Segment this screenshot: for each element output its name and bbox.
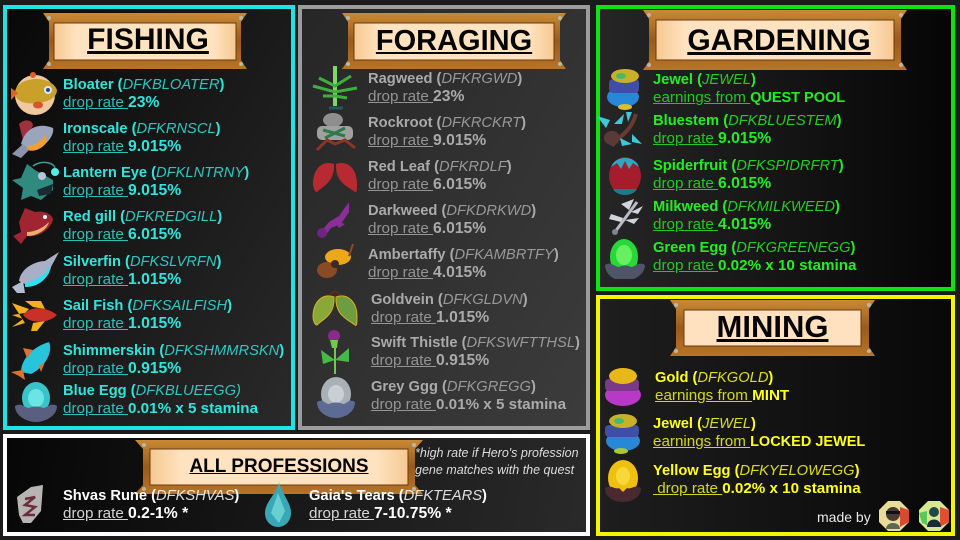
item: grey egg	[311, 374, 581, 418]
note: high rate condition: *high rate if Hero's profession	[415, 446, 579, 460]
text: gaia's tears: Gaia's Tears (DFKTEARS)	[309, 488, 487, 504]
text: grey egg: Grey Ggg (DFKGREGG)	[371, 379, 536, 395]
text: jewel	[653, 415, 865, 451]
text: shvas rune	[63, 487, 239, 523]
icon: shimmerskin fish	[11, 342, 50, 380]
icon: milkweed	[601, 194, 649, 238]
text: goldvein	[371, 291, 528, 327]
text: green egg: drop rate 0.02% x 10 stamina	[653, 257, 856, 274]
text: shimmerskin: drop rate 0.915%	[63, 360, 181, 377]
item: red gill	[13, 208, 222, 244]
panel: fishing	[3, 5, 295, 430]
heading: all professions banner	[135, 440, 423, 494]
heading: fishing banner	[43, 13, 247, 69]
text: red gill: Red gill (DFKREDGILL)	[63, 209, 222, 225]
text: ironscale: drop rate 9.015%	[63, 138, 181, 155]
item: gaia's tears	[257, 483, 527, 527]
heading: mining banner	[670, 300, 875, 356]
text: silverfin: drop rate 1.015%	[63, 271, 181, 288]
heading: foraging banner	[342, 13, 566, 69]
text: gold: earnings from MINT	[655, 387, 789, 404]
text: ironscale	[63, 121, 221, 155]
heading: foraging banner: FORAGING	[376, 25, 532, 57]
text: blue egg	[63, 383, 258, 417]
text: jewel: earnings from QUEST POOL	[653, 89, 845, 106]
text: milkweed: drop rate 4.015%	[653, 216, 771, 233]
item: milkweed	[601, 194, 871, 238]
text: ambertaffy	[368, 246, 559, 282]
text: silverfin: Silverfin (DFKSLVRFN)	[63, 254, 221, 270]
item: darkweed	[317, 202, 536, 238]
text: jewel	[653, 71, 845, 107]
text: yellow egg	[653, 462, 861, 498]
text: sail fish	[63, 298, 232, 332]
text: spiderfruit	[653, 157, 844, 193]
text: gold: Gold (DFKGOLD)	[655, 370, 773, 386]
icon: ironscale fish	[12, 120, 54, 158]
text: yellow egg: Yellow Egg (DFKYELOWEGG)	[653, 463, 860, 479]
item: lantern eye	[12, 162, 249, 200]
heading: gardening banner: GARDENING	[687, 24, 871, 57]
icon: sail fish	[12, 301, 57, 331]
text: goldvein: Goldvein (DFKGLDVN)	[371, 292, 528, 308]
text: bloater: drop rate 23%	[63, 94, 159, 111]
text: gold	[655, 369, 789, 405]
icon: swift thistle	[311, 330, 359, 374]
item: jewel	[599, 411, 869, 455]
item: spiderfruit	[601, 153, 871, 197]
icon: lantern eye fish	[12, 162, 59, 200]
text: ragweed	[368, 71, 522, 105]
text: bloater	[63, 77, 224, 111]
text: green egg: Green Egg (DFKGREENEGG)	[653, 240, 855, 256]
item: silverfin	[12, 252, 221, 293]
item: bloater	[11, 72, 224, 115]
icon: red gill fish	[13, 208, 53, 244]
text: blue egg: drop rate 0.01% x 5 stamina	[63, 400, 258, 417]
heading: mining banner: MINING	[717, 309, 828, 344]
text: bloater: Bloater (DFKBLOATER)	[63, 77, 224, 93]
text: silverfin	[63, 254, 221, 288]
text: bluestem	[653, 112, 842, 148]
icon: spiderfruit	[601, 153, 649, 197]
text: darkweed	[368, 203, 536, 237]
text: rockroot	[368, 115, 526, 149]
text: darkweed: Darkweed (DFKDRKWD)	[368, 203, 536, 219]
text: spiderfruit: Spiderfruit (DFKSPIDRFRT)	[653, 158, 844, 174]
icon: jewel bag	[599, 67, 647, 111]
text: lantern eye	[63, 165, 249, 199]
text: rockroot: Rockroot (DFKRCKRT)	[368, 115, 526, 131]
text: goldvein: drop rate 1.015%	[371, 309, 489, 326]
text: ambertaffy: Ambertaffy (DFKAMBRTFY)	[368, 247, 559, 263]
icon: red leaf	[313, 163, 357, 192]
text: grey egg	[371, 378, 566, 414]
text: lantern eye: drop rate 9.015%	[63, 182, 181, 199]
item: shvas rune	[11, 483, 281, 527]
text: swift thistle: drop rate 0.915%	[371, 352, 489, 369]
text: green egg	[653, 239, 856, 275]
item: blue egg	[15, 382, 258, 422]
text: swift thistle: Swift Thistle (DFKSWFTTHSL)	[371, 335, 580, 351]
text: jewel: Jewel (JEWEL)	[653, 416, 756, 432]
item: sail fish	[12, 298, 232, 332]
icon: blue egg	[15, 382, 57, 422]
icon: darkweed	[317, 202, 349, 238]
icon: yellow egg	[599, 458, 647, 502]
item: ambertaffy	[317, 244, 559, 281]
panel: gardening	[596, 5, 955, 291]
text: red leaf	[368, 159, 512, 193]
text: jewel: Jewel (JEWEL)	[653, 72, 756, 88]
item: bluestem	[596, 108, 866, 152]
icon: gaia's tears	[257, 483, 305, 527]
panel: all professions	[3, 434, 590, 536]
text: blue egg: Blue Egg (DFKBLUEEGG)	[63, 383, 241, 399]
heading: fishing banner: FISHING	[87, 23, 209, 56]
item: swift thistle	[311, 330, 581, 374]
text: sail fish: drop rate 1.015%	[63, 315, 181, 332]
text: yellow egg: drop rate 0.02% x 10 stamina	[657, 480, 861, 497]
text: gaia's tears: drop rate 7-10.75% *	[309, 505, 452, 522]
text: sail fish: Sail Fish (DFKSAILFISH)	[63, 298, 232, 314]
heading: all professions banner: ALL PROFESSIONS	[189, 456, 369, 477]
item: shimmerskin	[11, 342, 284, 380]
icon: rockroot	[316, 113, 356, 151]
text: bluestem: Bluestem (DFKBLUESTEM)	[653, 113, 842, 129]
text: shvas rune: Shvas Rune (DFKSHVAS)	[63, 488, 239, 504]
text: swift thistle	[371, 334, 580, 370]
text: ragweed: Ragweed (DFKRGWD)	[368, 71, 522, 87]
text: ambertaffy: drop rate 4.015%	[368, 264, 486, 281]
item: goldvein	[311, 287, 581, 331]
item: green egg	[601, 235, 871, 279]
heading: gardening banner	[643, 10, 907, 70]
note: high rate condition: gene matches with the quest	[415, 463, 574, 477]
text: red leaf: Red Leaf (DFKRDLF)	[368, 159, 512, 175]
icon: author avatar two	[919, 501, 949, 531]
panel: mining	[596, 295, 955, 536]
icon: jewel bag	[599, 411, 647, 455]
item: gold	[599, 365, 869, 409]
text: ironscale: Ironscale (DFKRNSCL)	[63, 121, 221, 137]
icon: goldvein	[311, 287, 359, 331]
icon: shvas rune	[11, 483, 59, 527]
icon: bluestem	[596, 108, 644, 152]
text: darkweed: drop rate 6.015%	[368, 220, 486, 237]
text: shimmerskin: Shimmerskin (DFKSHMMRSKN)	[63, 343, 284, 359]
text: bluestem: drop rate 9.015%	[653, 130, 771, 147]
item: red leaf	[313, 159, 512, 193]
icon: bloater fish	[11, 72, 57, 115]
icon: ragweed	[312, 66, 358, 110]
item: jewel	[599, 67, 869, 111]
text: gaia's tears	[309, 487, 487, 523]
text: red gill: drop rate 6.015%	[63, 226, 181, 243]
icon: ambertaffy	[317, 244, 354, 278]
credit: made by: made by	[817, 509, 871, 525]
icon: green egg	[601, 235, 649, 279]
text: ragweed: drop rate 23%	[368, 88, 464, 105]
icon: author avatar one	[879, 501, 909, 531]
text: milkweed: Milkweed (DFKMILKWEED)	[653, 199, 840, 215]
panel: foraging	[298, 5, 590, 430]
text: lantern eye: Lantern Eye (DFKLNTRNY)	[63, 165, 249, 181]
item: rockroot	[316, 113, 526, 151]
text: milkweed	[653, 198, 840, 234]
text: shvas rune: drop rate 0.2-1% *	[63, 505, 188, 522]
text: red gill	[63, 209, 222, 243]
icon: silverfin fish	[12, 252, 59, 293]
item: yellow egg	[599, 458, 869, 502]
text: grey egg: drop rate 0.01% x 5 stamina	[371, 396, 566, 413]
icon: gold bag	[599, 365, 647, 409]
item: ragweed	[312, 66, 522, 110]
text: spiderfruit: drop rate 6.015%	[653, 175, 771, 192]
note: high rate condition	[415, 445, 585, 479]
item: ironscale	[12, 120, 221, 158]
text: rockroot: drop rate 9.015%	[368, 132, 486, 149]
icon: grey egg	[311, 374, 359, 418]
text: shimmerskin	[63, 343, 284, 377]
text: jewel: earnings from LOCKED JEWEL	[653, 433, 865, 450]
text: red leaf: drop rate 6.015%	[368, 176, 486, 193]
